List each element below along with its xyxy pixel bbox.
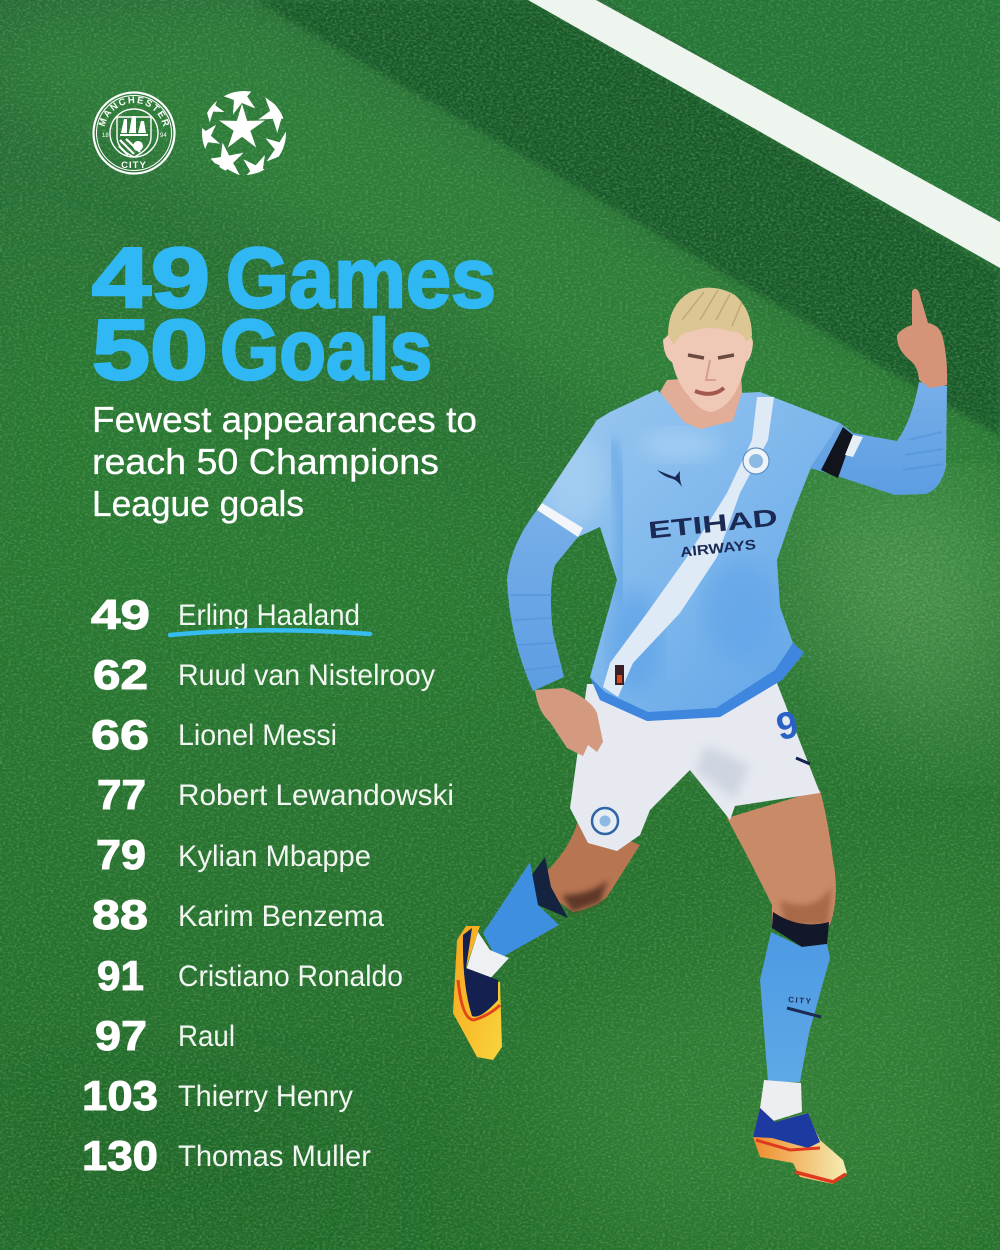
jersey: AIRWAYS	[679, 536, 757, 560]
subtitle: Fewest appearances to	[92, 399, 477, 440]
neck	[660, 375, 742, 429]
row: Raul: Raul	[178, 1020, 235, 1053]
logo: Manchester City crest: CITY	[121, 160, 147, 171]
row: Thomas Muller: 130	[82, 1132, 158, 1179]
player figure	[453, 288, 947, 1184]
highlight underline	[170, 630, 370, 635]
subtitle: League goals	[92, 483, 304, 524]
row: Cristiano Ronaldo	[97, 952, 403, 999]
row: Lionel Messi: 66	[91, 711, 149, 758]
row: Thierry Henry: Thierry Henry	[178, 1080, 353, 1113]
row: Karim Benzema	[92, 891, 384, 938]
row: Raul: 97	[95, 1012, 147, 1059]
row: Robert Lewandowski	[97, 771, 454, 818]
title: 49	[92, 231, 210, 326]
row: Ruud van Nistelrooy	[93, 651, 435, 698]
logo: Manchester City crest	[92, 91, 176, 175]
shorts: 9	[773, 704, 802, 749]
row: Lionel Messi: Lionel Messi	[178, 719, 337, 752]
row: Erling Haaland: 49	[91, 591, 150, 638]
row: Thomas Muller: Thomas Muller	[178, 1140, 371, 1173]
back leg	[453, 820, 640, 1060]
title: Goals	[220, 303, 432, 398]
raised arm	[810, 382, 947, 495]
row: Karim Benzema: Karim Benzema	[178, 900, 384, 933]
row: Thierry Henry: 103	[82, 1072, 158, 1119]
logo: Manchester City crest: 94	[160, 133, 167, 139]
row: Cristiano Ronaldo: 91	[97, 952, 144, 999]
row: Ruud van Nistelrooy: Ruud van Nistelrooy	[178, 659, 435, 692]
front leg	[727, 790, 847, 1184]
row: Raul	[95, 1012, 235, 1059]
logo: Manchester City crest: MANCHESTER	[98, 96, 169, 127]
row: Kylian Mbappe: Kylian Mbappe	[178, 840, 371, 873]
left arm sleeve	[507, 510, 578, 691]
ranking list	[82, 591, 454, 1179]
title: 50	[92, 303, 208, 398]
shorts	[570, 683, 820, 851]
row: Lionel Messi	[91, 711, 337, 758]
title: Games	[226, 231, 496, 326]
jersey: ETIHAD	[647, 504, 779, 545]
row: Robert Lewandowski: Robert Lewandowski	[178, 779, 454, 812]
subtitle: reach 50 Champions	[92, 441, 439, 482]
row: Thierry Henry	[82, 1072, 353, 1119]
row: Erling Haaland: Erling Haaland	[178, 599, 360, 632]
jersey	[537, 390, 840, 721]
row: Karim Benzema: 88	[92, 891, 148, 938]
head	[663, 288, 753, 412]
row: Ruud van Nistelrooy: 62	[93, 651, 148, 698]
row: Thomas Muller	[82, 1132, 371, 1179]
subtitle	[92, 399, 477, 524]
front leg: CITY	[788, 995, 813, 1006]
hand on hip	[535, 688, 603, 756]
logo: Manchester City crest: 18	[102, 133, 109, 139]
row: Kylian Mbappe	[96, 831, 371, 878]
row: Erling Haaland	[91, 591, 360, 638]
row: Robert Lewandowski: 77	[97, 771, 146, 818]
row: Cristiano Ronaldo: Cristiano Ronaldo	[178, 960, 403, 993]
logo: Champions League starball	[202, 91, 286, 175]
raised hand	[897, 289, 947, 388]
row: Kylian Mbappe: 79	[96, 831, 146, 878]
title	[92, 231, 496, 398]
